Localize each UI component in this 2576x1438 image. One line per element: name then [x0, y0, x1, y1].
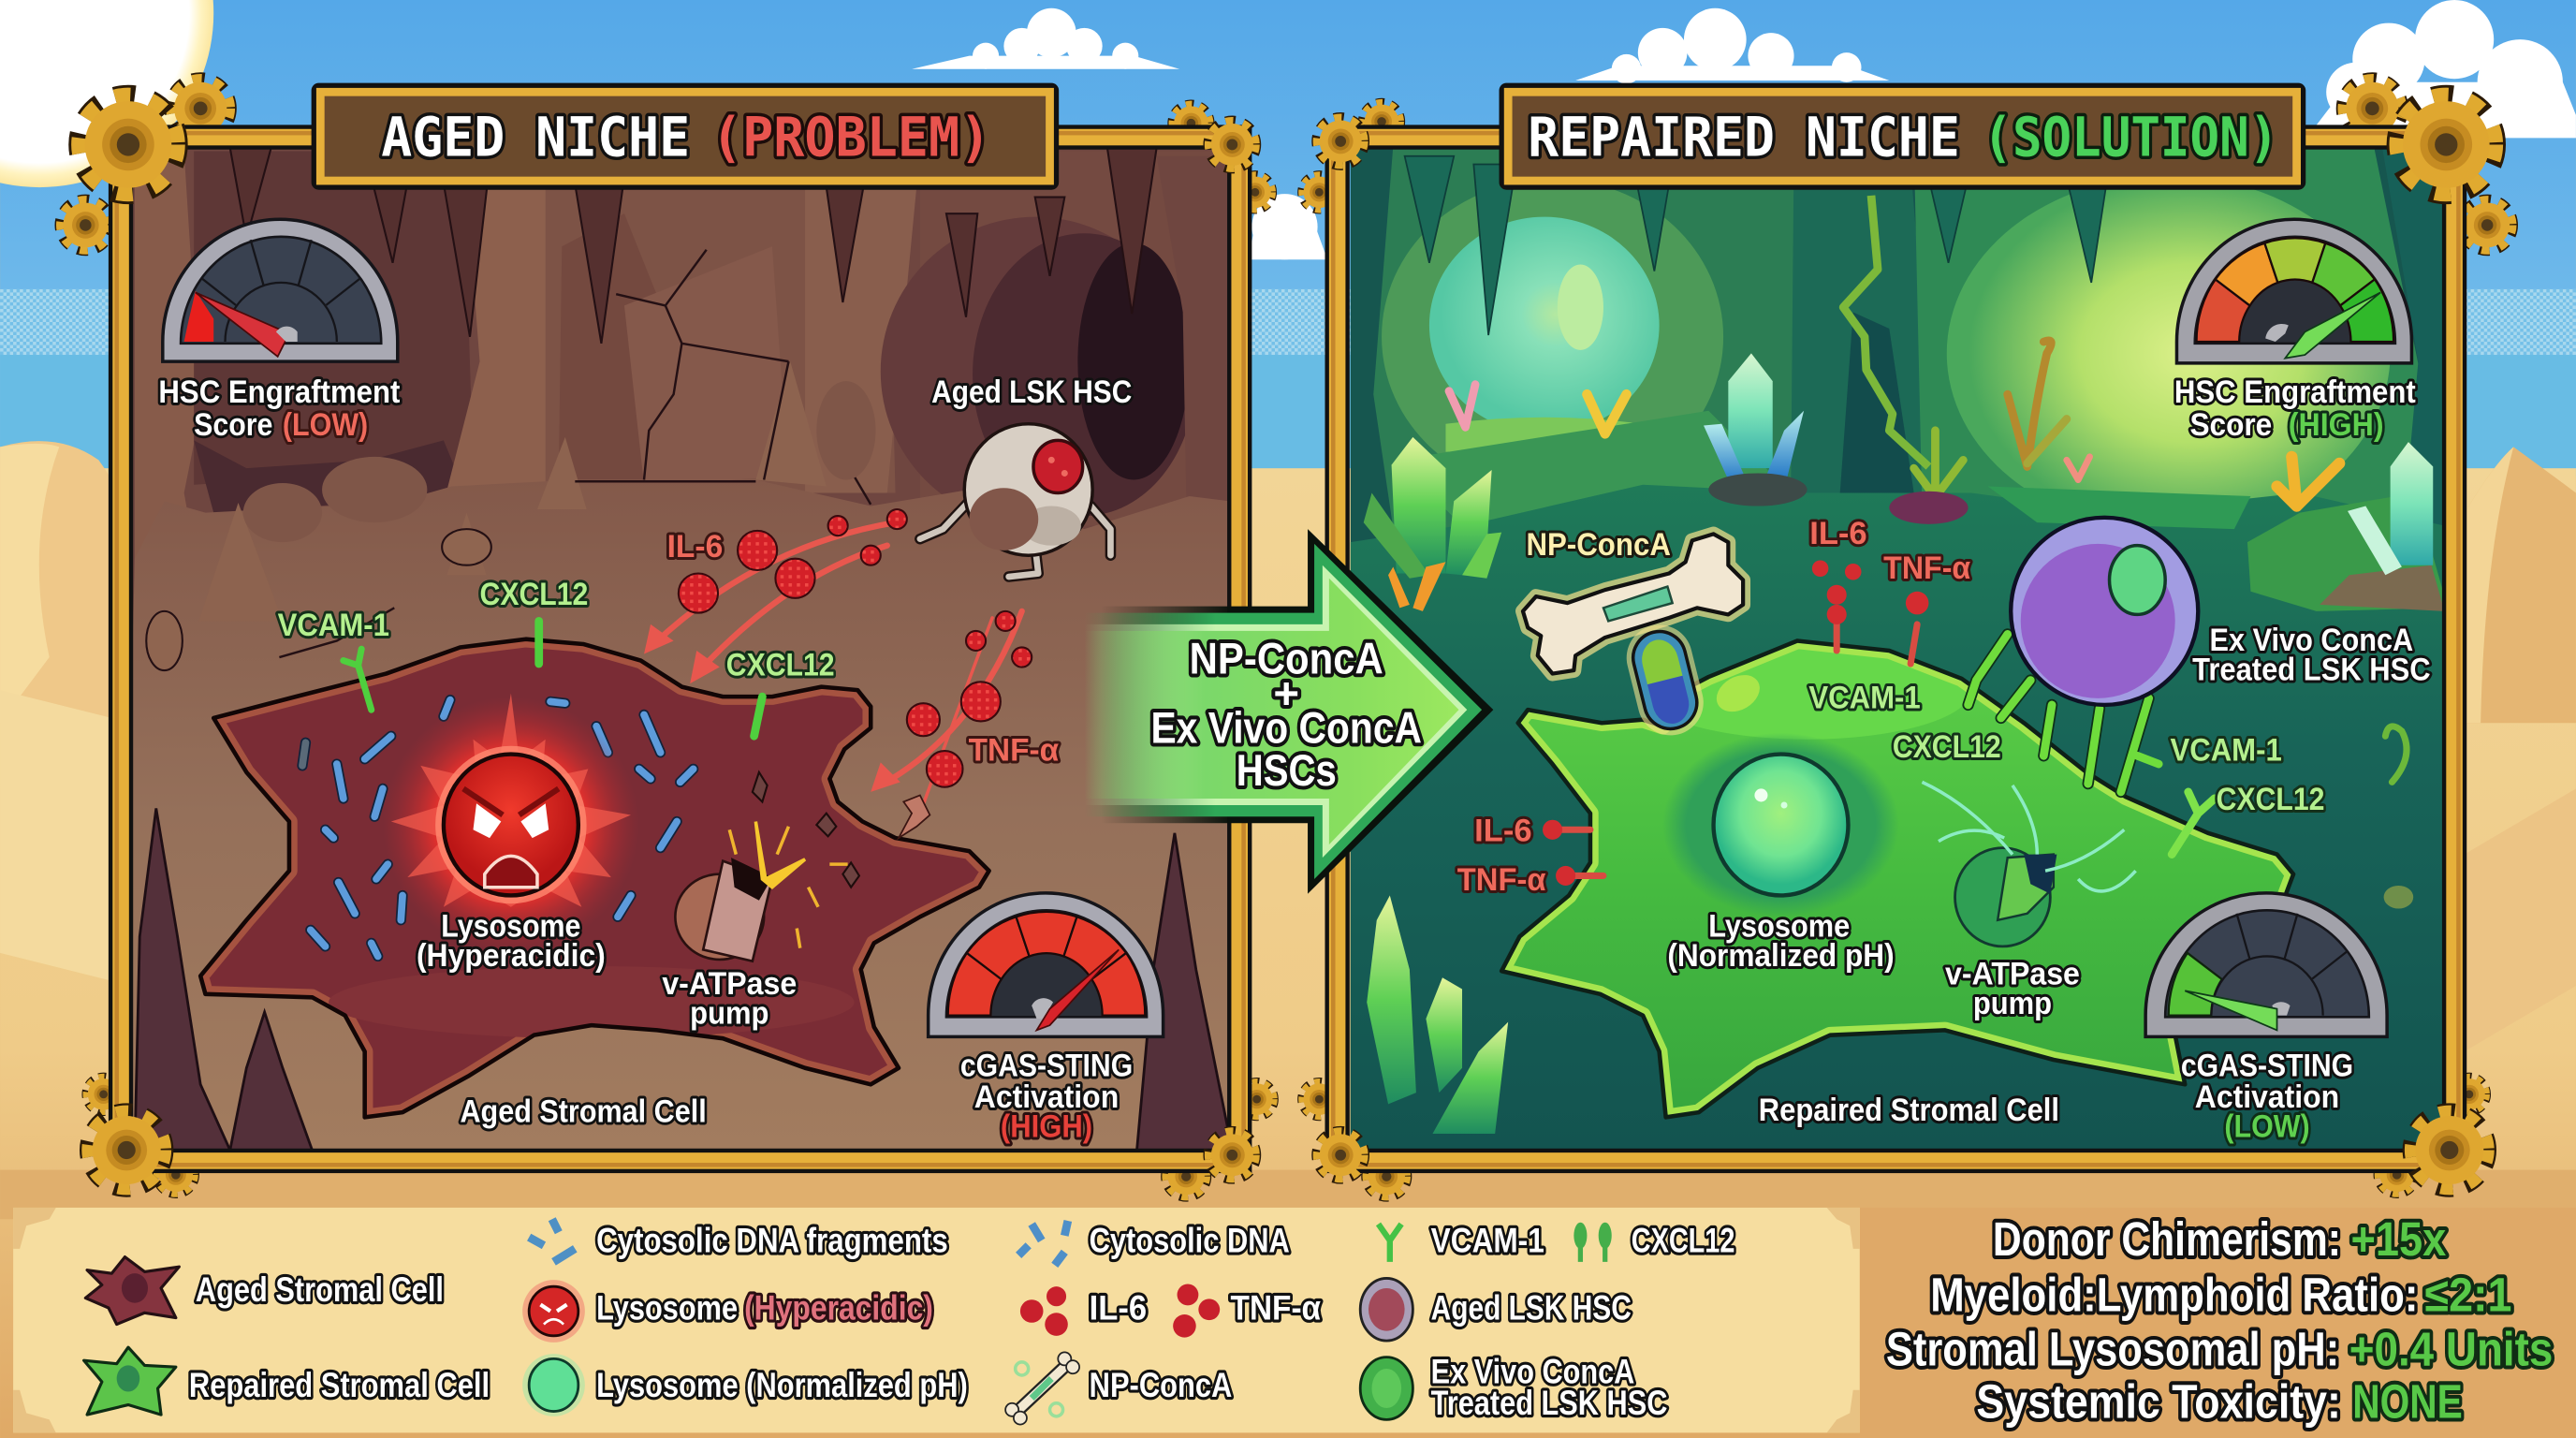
arrow label — [1150, 635, 1422, 796]
labels: repaired niche: TNF-α — [1457, 862, 1546, 898]
labels: repaired niche: (Normalized pH) — [1667, 938, 1895, 974]
legend: cytosolic DNA — [1018, 1221, 1290, 1265]
legend: lysosome hyperacidic — [522, 1280, 933, 1343]
frame gold: aged niche — [117, 133, 1244, 1165]
stat: donor chimerism: +15x — [2351, 1212, 2446, 1266]
arrow: treatment — [1084, 529, 1493, 894]
stats block — [1886, 1212, 2553, 1429]
plants and corals — [1449, 341, 2407, 782]
title: repaired niche solution: (SOLUTION) — [1983, 106, 2278, 169]
cave scene: repaired niche — [1351, 146, 2448, 1151]
legend panel — [13, 1208, 1860, 1432]
arrow label: Ex Vivo ConcA — [1150, 703, 1422, 753]
labels: aged niche: cGAS-STING — [960, 1049, 1133, 1084]
legend: cytosolic DNA fragments — [529, 1219, 948, 1262]
labels: repaired niche: v-ATPase — [1945, 956, 2080, 991]
title: aged niche problem: (PROBLEM) — [711, 106, 990, 169]
stat: stromal lysosomal pH: Stromal Lysosomal pH: — [1886, 1322, 2339, 1375]
legend: CXCL12 — [1573, 1221, 1734, 1262]
labels: aged niche: (LOW) — [283, 407, 368, 443]
sun — [0, 0, 213, 187]
boulders — [243, 382, 876, 522]
labels: repaired niche: TNF-α — [1883, 550, 1970, 586]
title: repaired niche solution: REPAIRED NICHE — [1528, 106, 1960, 169]
NP-ConcA bone and capsule — [1523, 534, 1743, 742]
labels: repaired niche: IL-6 — [1474, 814, 1532, 849]
legend: aged LSK HSC: Aged LSK HSC — [1431, 1288, 1632, 1327]
labels: repaired niche: (LOW) — [2224, 1108, 2310, 1144]
legend: lysosome hyperacidic: Lysosome — [596, 1288, 738, 1327]
labels: repaired niche: (HIGH) — [2289, 407, 2384, 443]
labels: aged niche: (Hyperacidic) — [417, 938, 606, 974]
receptors: VCAM-1 and CXCL12 — [344, 621, 762, 736]
labels: repaired niche: Lysosome — [1708, 908, 1850, 944]
labels: repaired niche: Activation — [2195, 1079, 2339, 1115]
gauge: cGAS-STING activation low — [2145, 893, 2387, 1036]
labels: repaired niche — [1457, 374, 2431, 1144]
legend: lysosome normalized: Lysosome (Normalized pH) — [596, 1366, 968, 1404]
gears behind frames — [61, 80, 2511, 1196]
stat: systemic toxicity: Systemic Toxicity: — [1976, 1375, 2341, 1429]
labels: repaired niche: cGAS-STING — [2181, 1049, 2353, 1084]
legend: CXCL12: CXCL12 — [1632, 1221, 1734, 1259]
arrow label: HSCs — [1237, 746, 1337, 796]
title: aged niche problem — [314, 85, 1057, 187]
legend: VCAM-1 — [1379, 1221, 1544, 1262]
labels: aged niche: (HIGH) — [1001, 1108, 1092, 1144]
frame: repaired niche — [1338, 138, 2454, 1161]
labels: aged niche: CXCL12 — [726, 647, 835, 682]
labels: aged niche: HSC Engraftment — [158, 374, 400, 410]
legend: TNF-alpha — [1173, 1284, 1321, 1338]
legend: VCAM-1: VCAM-1 — [1431, 1221, 1544, 1259]
stat: donor chimerism: Donor Chimerism: — [1993, 1212, 2341, 1266]
labels: repaired niche: Repaired Stromal Cell — [1759, 1093, 2059, 1128]
ex vivo ConcA treated LSK HSC — [1969, 518, 2198, 792]
stalagmites foreground — [135, 808, 1232, 1151]
labels: aged niche: IL-6 — [667, 529, 723, 565]
labels: aged niche: v-ATPase — [662, 966, 797, 1002]
labels: aged niche: Aged LSK HSC — [931, 374, 1132, 410]
legend: ex vivo ConcA treated LSK HSC — [1360, 1353, 1667, 1422]
labels: aged niche: pump — [690, 995, 768, 1031]
legend: aged stromal cell: Aged Stromal Cell — [196, 1270, 444, 1309]
crystals — [1364, 353, 2433, 1134]
labels: repaired niche: Score — [2190, 407, 2272, 443]
legend: lysosome hyperacidic: (Hyperacidic) — [744, 1288, 933, 1327]
labels: aged niche: TNF-α — [969, 733, 1059, 769]
legend: cytosolic DNA: Cytosolic DNA — [1090, 1221, 1290, 1259]
legend: repaired stromal cell — [84, 1347, 490, 1415]
labels: repaired niche: IL-6 — [1809, 516, 1867, 551]
aged LSK HSC — [920, 424, 1110, 577]
labels: repaired niche: CXCL12 — [2217, 782, 2324, 817]
panel: aged niche — [121, 138, 1239, 1161]
stalactites — [1405, 156, 2110, 335]
stat: myeloid lymphoid ratio: Myeloid:Lymphoid Ratio: — [1930, 1269, 2418, 1322]
gauge: cGAS-STING activation high — [929, 893, 1164, 1036]
gauge: HSC engraftment score high — [2176, 219, 2411, 363]
title: repaired niche solution — [1501, 85, 2304, 187]
repaired stromal cell — [1501, 560, 2293, 1117]
panel: repaired niche — [1338, 138, 2454, 1161]
legend: lysosome normalized — [522, 1354, 968, 1416]
legend: ex vivo ConcA treated LSK HSC: Treated LSK HSC — [1431, 1384, 1667, 1422]
legend: NP-ConcA: NP-ConcA — [1090, 1366, 1232, 1404]
legend: cytosolic DNA fragments: Cytosolic DNA fragments — [596, 1221, 948, 1259]
clouds — [912, 0, 2576, 259]
gears: main corner gears — [80, 96, 2494, 1188]
stat: stromal lysosomal pH: +0.4 Units — [2349, 1322, 2553, 1375]
arrow label: NP-ConcA — [1190, 635, 1383, 684]
lysosome hyperacidic — [383, 694, 639, 953]
cytokine arrows and particles — [644, 509, 1032, 838]
labels: aged niche — [158, 374, 1133, 1144]
labels: aged niche: VCAM-1 — [278, 608, 389, 643]
stalagmites on back wall — [235, 361, 805, 515]
labels: aged niche: Aged Stromal Cell — [460, 1094, 707, 1130]
legend: NP-ConcA — [1005, 1352, 1232, 1425]
legend: ex vivo ConcA treated LSK HSC: Ex Vivo ConcA — [1431, 1353, 1634, 1391]
stalactites — [230, 148, 1157, 344]
v-ATPase pump broken — [675, 772, 859, 961]
v-ATPase pump normal — [1922, 782, 2136, 946]
legend: TNF-alpha: TNF-α — [1231, 1288, 1321, 1327]
labels: repaired niche: VCAM-1 — [2170, 733, 2282, 769]
frame gold: repaired niche — [1333, 133, 2458, 1165]
cave scene: aged niche — [131, 146, 1232, 1151]
legend: aged stromal cell — [85, 1257, 444, 1325]
labels: repaired niche: VCAM-1 — [1808, 680, 1921, 715]
labels: aged niche: Lysosome — [441, 908, 580, 944]
title: aged niche problem: AGED NICHE — [381, 106, 690, 169]
legend: aged LSK HSC — [1360, 1278, 1632, 1341]
stat: systemic toxicity: NONE — [2352, 1375, 2463, 1429]
arrow label: + — [1273, 668, 1299, 718]
labels: aged niche: CXCL12 — [480, 577, 588, 612]
aged stromal cell — [200, 621, 989, 1117]
rock cracks — [279, 250, 871, 657]
labels: repaired niche: Ex Vivo ConcA — [2210, 623, 2413, 658]
stat: myeloid lymphoid ratio: ≤2:1 — [2424, 1269, 2511, 1322]
labels: repaired niche: CXCL12 — [1893, 729, 2001, 765]
gauge: HSC engraftment score low — [163, 219, 398, 361]
labels: aged niche: Score — [194, 407, 272, 443]
labels: repaired niche: pump — [1973, 986, 2052, 1021]
labels: repaired niche: HSC Engraftment — [2174, 374, 2416, 410]
lysosome normalized — [1662, 733, 1899, 917]
legend: IL-6: IL-6 — [1090, 1288, 1147, 1327]
labels: aged niche: Activation — [974, 1079, 1119, 1115]
labels: repaired niche: NP-ConcA — [1526, 527, 1671, 563]
legend: IL-6 — [1020, 1286, 1147, 1336]
frame: aged niche — [121, 138, 1239, 1161]
legend: repaired stromal cell: Repaired Stromal Cell — [189, 1366, 490, 1404]
receptors with blocked cytokines — [1547, 608, 2215, 875]
cytosolic DNA fragments — [302, 700, 694, 956]
vine — [1843, 196, 1928, 466]
labels: repaired niche: Treated LSK HSC — [2192, 653, 2431, 688]
